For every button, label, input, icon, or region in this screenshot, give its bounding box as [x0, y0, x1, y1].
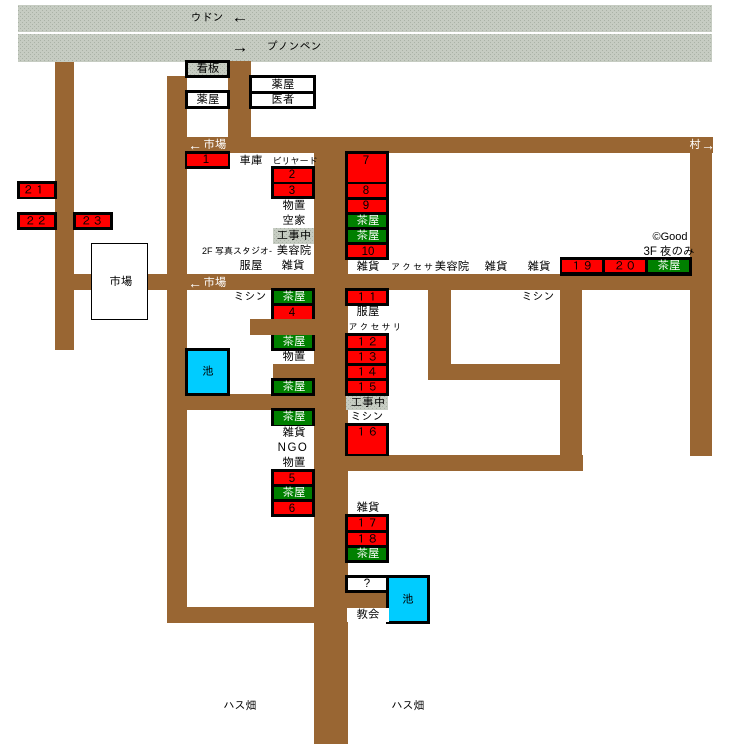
signboard [185, 60, 230, 78]
label: sewing machine: ミシン [234, 291, 266, 303]
shop 5, tea house, shop 6: 茶屋 [282, 486, 306, 499]
road: Phnom Penh highway lane: → [232, 38, 248, 56]
market building: 市場 [110, 275, 132, 288]
pond right: 池 [402, 593, 414, 606]
road label: to market (lower) [188, 275, 226, 291]
road label: to market (lower): 市場 [204, 276, 226, 289]
shop 11: １１ [356, 292, 378, 304]
label: storage: 物置 [282, 349, 306, 363]
brown road network [55, 61, 713, 744]
doctor: 医者 [272, 93, 294, 106]
road label: to market (lower): ← [188, 275, 202, 291]
signboard: 看板 [196, 62, 220, 75]
shops 12 to 15 [345, 333, 389, 396]
road label: to market (upper): 市場 [204, 138, 226, 151]
shops 2 and 3 [271, 166, 315, 199]
shops 17, 18 and tea house: 茶屋 [356, 547, 380, 560]
road label: to market (upper) [188, 137, 226, 153]
shop 5, tea house, shop 6: 5 [289, 473, 295, 485]
shops 12 to 15: １３ [356, 352, 378, 364]
shops 12 to 15: １４ [356, 367, 378, 379]
label: general goods: 雑貨 [528, 259, 550, 273]
road: Phnom Penh highway lane [18, 34, 712, 62]
shop 1: 1 [203, 154, 209, 166]
shop stack 7 to 10: 9 [363, 200, 369, 212]
shops 19, 20 and tea house: １９ [570, 261, 594, 273]
label: sewing machine: ミシン [522, 291, 554, 303]
road label: to market (upper): ← [188, 137, 202, 153]
label: lotus field right: ハス畑 [392, 700, 424, 712]
pharmacy left: 薬屋 [196, 93, 220, 106]
road label: to village [689, 137, 715, 153]
label: general goods: 雑貨 [356, 500, 380, 514]
road: Udon highway lane: ← [232, 8, 248, 26]
label: lotus field left: ハス畑 [224, 700, 256, 712]
tea house and shop 4: 4 [289, 307, 296, 319]
tea house: 茶屋 [282, 380, 306, 393]
under construction upper: 工事中 [277, 229, 311, 242]
road: Phnom Penh highway lane: プノンペン [266, 40, 322, 53]
pond right [386, 575, 430, 624]
label: general goods: 雑貨 [282, 425, 306, 439]
label: sewing machine: ミシン [350, 411, 384, 423]
tea house [271, 378, 315, 396]
shop 23: ２３ [80, 216, 104, 228]
label: beauty salon: 美容院 [277, 244, 312, 257]
shops 19, 20 and tea house: ２０ [614, 261, 636, 273]
label: storage: 物置 [282, 198, 306, 212]
label: church [347, 608, 389, 622]
shops 2 and 3: 3 [289, 185, 295, 197]
shops 12 to 15: １５ [356, 382, 378, 394]
pharmacy right: 薬屋 [272, 78, 295, 91]
unknown shop [345, 575, 389, 593]
unknown shop: ? [364, 578, 370, 590]
shops 17, 18 and tea house [345, 514, 389, 563]
shops 19, 20 and tea house: 茶屋 [658, 259, 681, 272]
label: billiards: ビリヤード [272, 156, 318, 166]
label: beauty salon: 美容院 [435, 260, 470, 273]
shop 22 [17, 212, 57, 230]
pond left: 池 [202, 365, 214, 378]
tea house: 茶屋 [282, 410, 306, 423]
shop stack 7 to 10: 8 [363, 185, 369, 197]
label: church: 教会 [356, 608, 380, 621]
label: general goods: 雑貨 [282, 258, 304, 272]
road: Udon highway lane [18, 5, 712, 32]
shop stack 7 to 10: 7 [363, 155, 369, 167]
shops 2 and 3: 2 [289, 169, 295, 181]
doctor [249, 91, 316, 109]
shop stack 7 to 10: 茶屋 [356, 229, 380, 242]
road label: to village: 村 [689, 138, 701, 151]
shop stack 7 to 10 [345, 151, 389, 260]
pharmacy right [249, 75, 316, 93]
label: accessories: アクセサリ [348, 322, 404, 332]
shop 21: ２１ [22, 185, 46, 197]
shop 5, tea house, shop 6 [271, 469, 315, 517]
label: general goods: 雑貨 [356, 259, 380, 273]
shop stack 7 to 10: 10 [362, 246, 374, 258]
tea house [271, 408, 315, 426]
pond left [185, 348, 230, 396]
shops 12 to 15: １２ [356, 337, 378, 349]
shop 22: ２２ [24, 216, 48, 228]
tea house and shop 4 [271, 288, 315, 319]
label: general goods: 雑貨 [484, 259, 508, 273]
road: Udon highway lane: ウドン [190, 12, 224, 24]
shops 19, 20 and tea house [560, 257, 692, 276]
label: garage: 車庫 [240, 154, 262, 167]
label: vacant house: 空家 [282, 214, 306, 227]
under construction upper [273, 228, 314, 244]
tea house [271, 335, 315, 351]
shops 17, 18 and tea house: １８ [356, 534, 378, 546]
shop 16 [345, 423, 389, 456]
label: accessories: アクセサ [391, 262, 435, 272]
label: NGO: NGO [278, 442, 308, 454]
shop 16: １６ [356, 427, 378, 439]
shop 21 [17, 181, 57, 199]
pharmacy left [185, 90, 230, 109]
label: 2F photo studio: 2F 写真スタジオ- [202, 246, 272, 256]
under construction lower: 工事中 [351, 396, 385, 409]
tea house and shop 4: 茶屋 [282, 290, 306, 303]
label: storage: 物置 [282, 455, 306, 469]
label: clothes shop: 服屋 [356, 306, 380, 318]
tea house: 茶屋 [282, 335, 306, 348]
shop stack 7 to 10: 茶屋 [356, 214, 380, 227]
label: 3F night only: 3F 夜のみ [643, 245, 695, 258]
credit: ©Good [652, 231, 688, 243]
shops 17, 18 and tea house: １７ [356, 518, 378, 530]
market building [92, 244, 148, 320]
shop 23 [73, 212, 113, 230]
shop 1 [185, 151, 230, 169]
shop 11 [345, 288, 389, 306]
road label: to village: → [701, 137, 715, 153]
label: clothes shop: 服屋 [240, 260, 263, 272]
shop 5, tea house, shop 6: 6 [289, 503, 295, 515]
